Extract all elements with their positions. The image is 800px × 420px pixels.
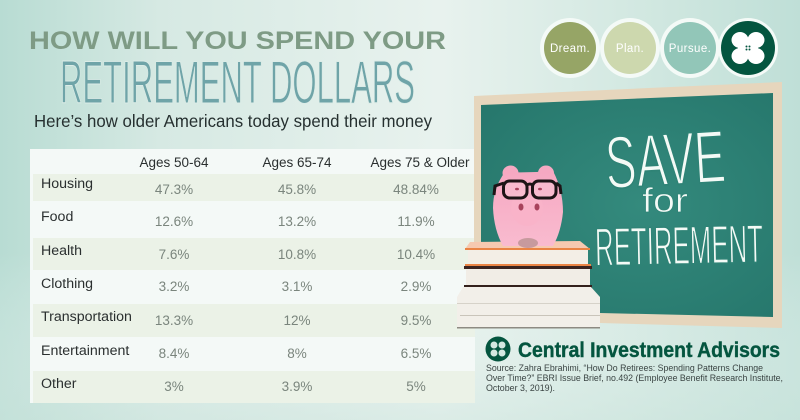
panel: spending table bbox=[30, 149, 475, 403]
row: Health: Health bbox=[41, 243, 82, 259]
row: Health: 7.6% bbox=[159, 247, 189, 262]
table header: Ages 50-64 bbox=[139, 155, 209, 170]
table header: Ages 65-74 bbox=[262, 155, 332, 170]
row: Food: 11.9% bbox=[397, 214, 435, 229]
source note: October 3, 2019). bbox=[486, 383, 555, 394]
chalk text: SAVE: SAVE bbox=[603, 115, 728, 204]
source note bbox=[486, 363, 783, 394]
table header: Ages 75 & Older bbox=[370, 155, 470, 170]
row: Health: 10.8% bbox=[278, 247, 316, 262]
row: Other: 5% bbox=[406, 379, 426, 394]
row: Clothing: 3.2% bbox=[159, 279, 189, 294]
row: Entertainment bbox=[41, 343, 431, 361]
row: Clothing: Clothing bbox=[41, 276, 93, 292]
piggy bank with glasses bbox=[493, 166, 563, 248]
source note: Source: Zahra Ebrahimi, “How Do Retirees: Spending Patterns Change bbox=[486, 363, 763, 374]
row: Entertainment: 6.5% bbox=[401, 346, 431, 361]
row: Entertainment: 8% bbox=[287, 346, 307, 361]
row: Clothing: 2.9% bbox=[401, 279, 431, 294]
circle: Pursue: Pursue. bbox=[669, 43, 711, 55]
row: Housing: Housing bbox=[41, 176, 93, 192]
row: Other: Other bbox=[41, 376, 77, 392]
row: Transportation: 13.3% bbox=[155, 313, 193, 328]
row: Health: 10.4% bbox=[397, 247, 435, 262]
circle: Pursue bbox=[660, 18, 720, 78]
row: Transportation: 9.5% bbox=[401, 313, 431, 328]
row: Transportation bbox=[33, 304, 475, 337]
subtitle: Here’s how older Americans today spend their money bbox=[34, 111, 432, 131]
books stack bbox=[457, 241, 600, 328]
icon: dogwood bbox=[486, 336, 510, 362]
circle: Dream bbox=[540, 18, 600, 78]
pig body bbox=[493, 171, 563, 246]
row: Food: 12.6% bbox=[155, 214, 193, 229]
row: Food: Food bbox=[41, 209, 73, 225]
circle: dogwood logo bbox=[718, 18, 778, 78]
tagline circles bbox=[540, 18, 778, 78]
row: Food: 13.2% bbox=[278, 214, 316, 229]
glasses bbox=[494, 181, 561, 198]
row: Transportation: Transportation bbox=[41, 309, 132, 325]
pig snout bbox=[511, 190, 543, 226]
table header bbox=[139, 155, 470, 170]
row: Food bbox=[41, 209, 435, 229]
row: Other bbox=[33, 371, 475, 403]
row: Entertainment: 8.4% bbox=[159, 346, 189, 361]
book: middle bbox=[464, 266, 592, 288]
circle: Plan bbox=[600, 18, 660, 78]
book: top bbox=[465, 241, 591, 266]
row: Clothing: 3.1% bbox=[282, 279, 312, 294]
row: Housing: 45.8% bbox=[278, 182, 316, 197]
row: Other: 3.9% bbox=[282, 379, 312, 394]
circle: Plan: Plan. bbox=[616, 43, 644, 55]
title line 2: RETIREMENT DOLLARS bbox=[60, 49, 415, 116]
row: Transportation: 12% bbox=[283, 313, 311, 328]
row: Entertainment: Entertainment bbox=[41, 343, 129, 359]
book: bottom stack bbox=[457, 287, 600, 328]
chalk text: for: for bbox=[642, 182, 688, 220]
row: Clothing bbox=[41, 276, 431, 294]
circle: Dream: Dream. bbox=[550, 43, 590, 55]
logo: Central Investment Advisors bbox=[486, 336, 780, 362]
row: Other: 3% bbox=[164, 379, 184, 394]
blackboard bbox=[474, 82, 782, 328]
pig legs gap bbox=[518, 238, 538, 248]
pig ears bbox=[502, 166, 554, 180]
row: Health bbox=[33, 238, 475, 270]
title line 1: HOW WILL YOU SPEND YOUR bbox=[29, 27, 446, 55]
row: Housing: 47.3% bbox=[155, 182, 193, 197]
row: Housing: 48.84% bbox=[393, 182, 439, 197]
source note: Over Time?” EBRI Issue Brief, no.492 (Employee Benefit Research Institute, bbox=[486, 373, 783, 384]
row: Housing bbox=[33, 174, 475, 201]
